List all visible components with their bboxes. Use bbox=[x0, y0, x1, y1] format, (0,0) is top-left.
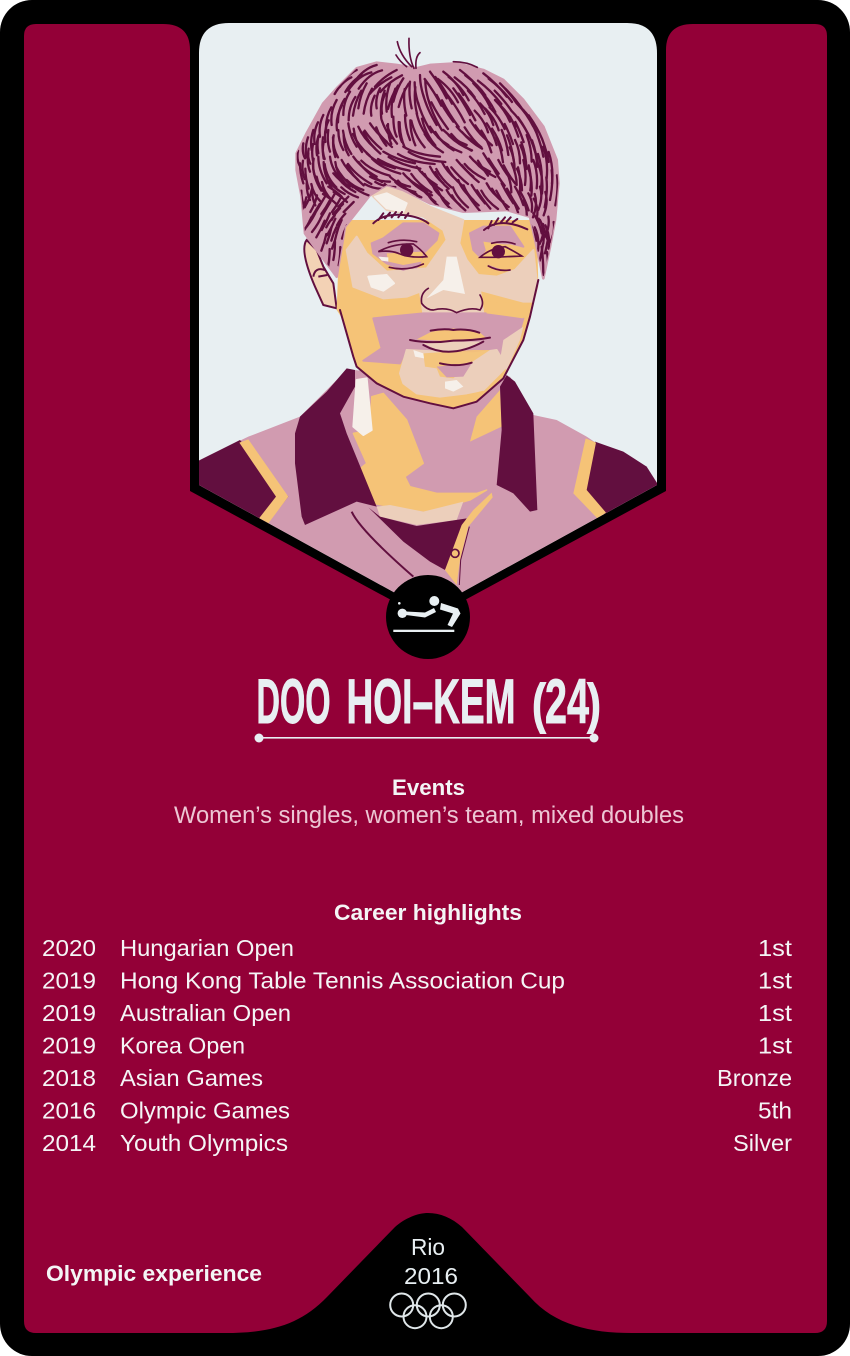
career highlights table: 2018 bbox=[42, 1065, 96, 1091]
button bbox=[451, 549, 459, 557]
career highlights table: Australian Open bbox=[120, 1000, 291, 1026]
career highlights table bbox=[42, 935, 792, 1156]
career highlights table: 1st bbox=[758, 1000, 792, 1026]
left sleeve stripe bbox=[239, 439, 288, 523]
portrait background bbox=[199, 23, 657, 623]
face bbox=[337, 220, 538, 408]
face highlights bbox=[375, 193, 407, 212]
career highlights table: Hong Kong Table Tennis Association Cup bbox=[120, 968, 565, 994]
shirt seam bbox=[352, 512, 413, 577]
icon: olympic rings bbox=[390, 1294, 466, 1328]
title: HOI–KEM bbox=[346, 667, 516, 737]
title underline bbox=[254, 734, 598, 742]
chin bbox=[400, 350, 507, 397]
events heading: Events bbox=[392, 775, 465, 800]
placket bbox=[445, 493, 493, 585]
eye shadows bbox=[372, 223, 438, 270]
career highlights table: Asian Games bbox=[120, 1065, 263, 1091]
undershirt bbox=[368, 507, 467, 570]
icon: table tennis player bbox=[393, 596, 460, 632]
jaw outline bbox=[340, 280, 538, 408]
career highlights table: 2019 bbox=[42, 1000, 96, 1026]
games host and year: 2016 bbox=[404, 1263, 458, 1289]
nose outline bbox=[421, 288, 482, 313]
right sleeve bbox=[585, 442, 658, 517]
career highlights table: Korea Open bbox=[120, 1032, 245, 1058]
portrait illustration bbox=[199, 23, 657, 592]
career highlights table: Olympic Games bbox=[120, 1098, 290, 1124]
title: ) bbox=[587, 672, 601, 734]
career highlights table: Bronze bbox=[717, 1065, 792, 1091]
title: DOO bbox=[256, 667, 330, 737]
olympic experience label: Olympic experience bbox=[46, 1261, 262, 1286]
shirt bbox=[200, 370, 657, 592]
career highlights table: 5th bbox=[758, 1098, 792, 1124]
title: 24 bbox=[545, 667, 589, 737]
left collar bbox=[295, 368, 377, 525]
career highlights table: 1st bbox=[758, 1032, 792, 1058]
hair strokes bbox=[295, 65, 558, 282]
right sleeve stripe bbox=[573, 438, 606, 518]
left sleeve bbox=[197, 440, 288, 527]
career highlights table: Hungarian Open bbox=[120, 935, 294, 961]
title bbox=[256, 667, 601, 737]
games host and year bbox=[404, 1234, 458, 1289]
career highlights heading: Career highlights bbox=[334, 900, 522, 925]
career highlights table: 2014 bbox=[42, 1130, 96, 1156]
neck bbox=[355, 370, 358, 371]
career highlights table: 2016 bbox=[42, 1098, 96, 1124]
hair bbox=[297, 63, 558, 278]
eyebrows bbox=[373, 212, 527, 230]
events text: Women’s singles, women’s team, mixed doubles bbox=[174, 802, 684, 829]
career highlights table: Youth Olympics bbox=[120, 1130, 288, 1156]
ear bbox=[304, 240, 337, 308]
career highlights table: 1st bbox=[758, 968, 792, 994]
sport badge bbox=[386, 575, 470, 659]
eyes bbox=[378, 240, 522, 270]
mouth area shading bbox=[363, 313, 523, 370]
career highlights table: Silver bbox=[733, 1130, 792, 1156]
career highlights table: 1st bbox=[758, 935, 792, 961]
career highlights table: 2019 bbox=[42, 1032, 96, 1058]
face light patches bbox=[347, 185, 537, 313]
career highlights table: 2019 bbox=[42, 968, 96, 994]
hair tuft bbox=[396, 38, 477, 68]
neck highlights bbox=[353, 393, 487, 512]
career highlights table: 2020 bbox=[42, 935, 96, 961]
title: ( bbox=[532, 672, 547, 734]
right collar bbox=[497, 375, 537, 512]
games host and year: Rio bbox=[411, 1234, 445, 1260]
lips bbox=[417, 328, 487, 342]
